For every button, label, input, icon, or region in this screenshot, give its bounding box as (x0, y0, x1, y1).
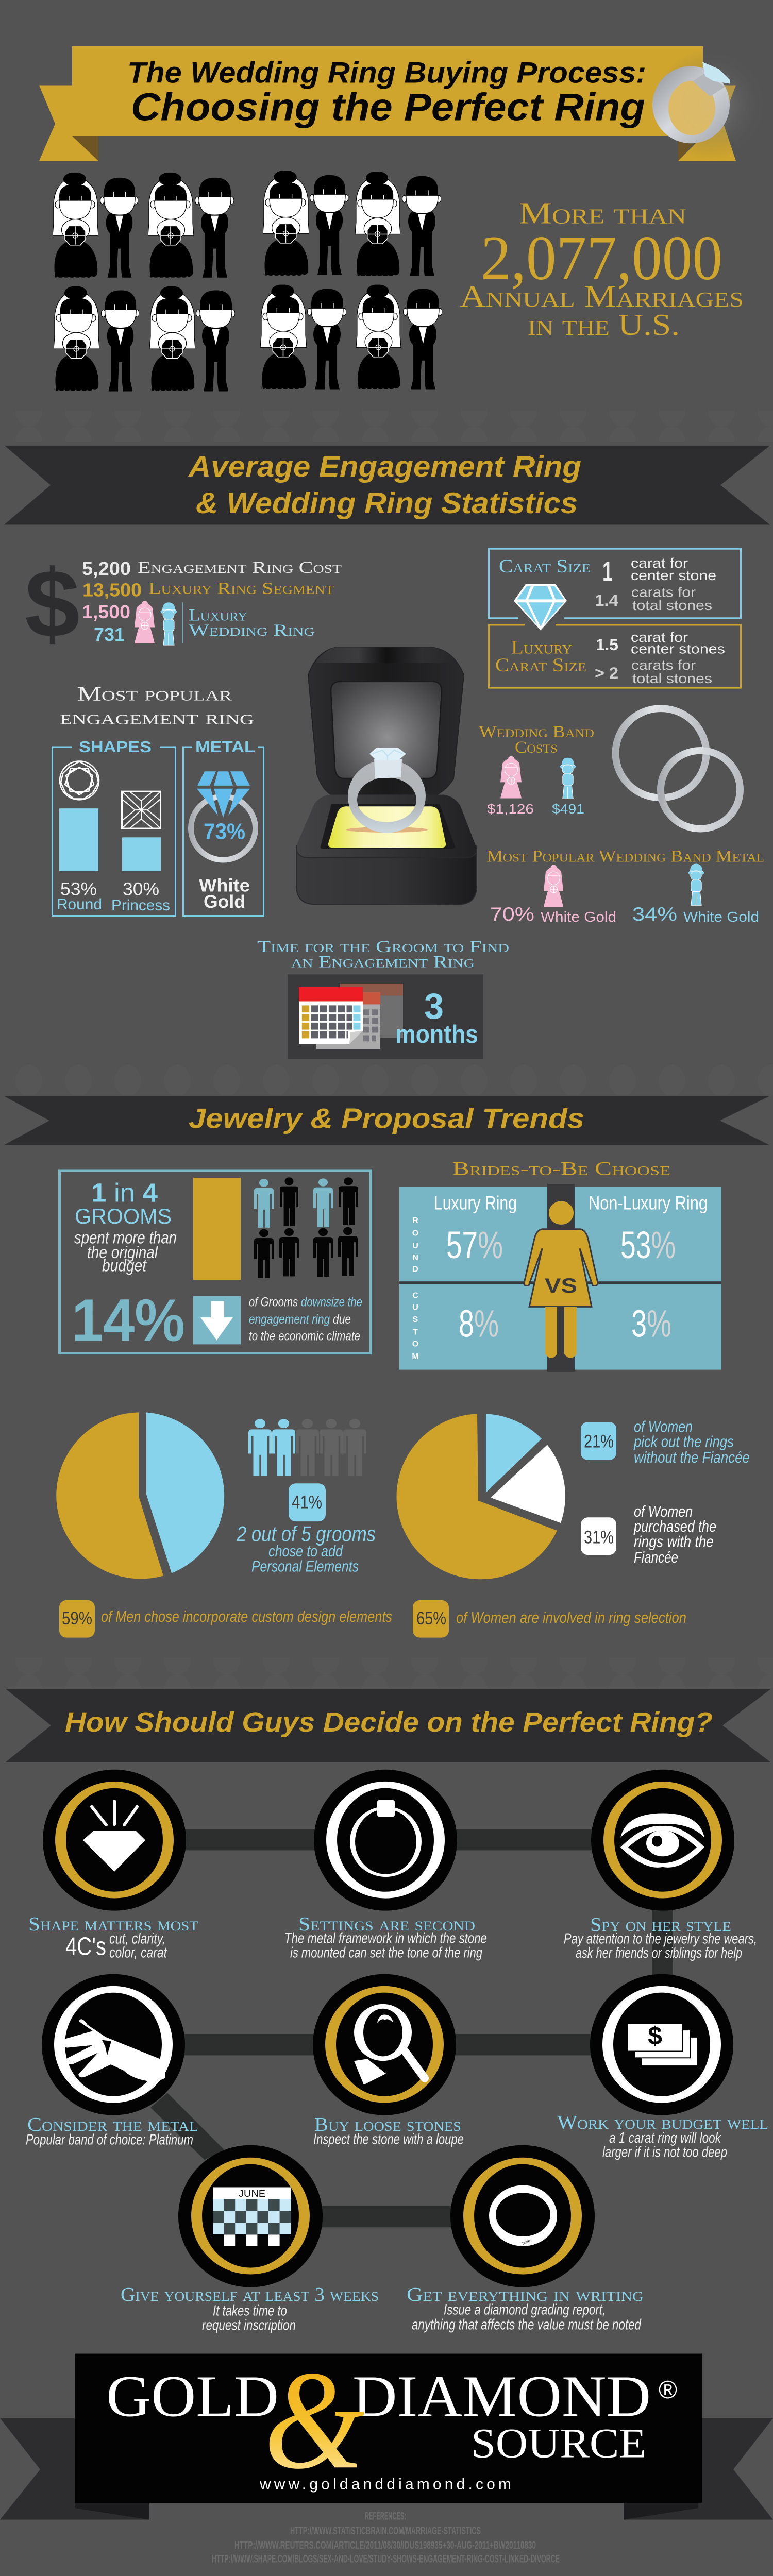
carats for total stones: carats for (631, 657, 696, 673)
description: request inscription (202, 2317, 296, 2333)
heading (257, 938, 509, 971)
label: white gold (199, 875, 250, 912)
callout: 31% of women: rings with the (634, 1533, 714, 1550)
icon: dollar sign: $ (25, 550, 80, 657)
references (212, 2510, 560, 2565)
callout: 21% of women: without the Fiancée (634, 1448, 750, 1466)
icon: round cut (60, 761, 99, 800)
value: bride cost: $1,126 (487, 802, 534, 817)
icon: woman VS: VS (545, 1275, 577, 1297)
references: HTTP://WWW.REUTERS.COM/ARTICLE/2011/08/30/IDUS198935+30-AUG-2011+BW20110830 (234, 2538, 536, 2551)
title line 2: Choosing the Perfect Ring (131, 86, 645, 128)
label: white gold: White (199, 875, 250, 896)
value: 3: 3 (424, 986, 444, 1027)
icon: diamond (514, 584, 567, 630)
callout: 21% of women: of Women (634, 1418, 693, 1436)
icon: June calendar: JUNE (239, 2188, 265, 2199)
heading: Jewelry & Proposal Trends (189, 1103, 584, 1134)
heading: Get everything in writing (407, 2284, 644, 2306)
description: larger if it is not too deep (602, 2144, 727, 2160)
callout: 65% of women: of Women are involved in ring selection (456, 1608, 686, 1626)
value: 53%: 53% (60, 879, 97, 900)
badge: 41%: 41% (292, 1492, 322, 1512)
heading: Buy loose stones (314, 2114, 461, 2136)
heading: Consider the metal (27, 2114, 198, 2136)
carat for center stone: center stone (631, 568, 716, 583)
shapes label: SHAPES (79, 738, 152, 756)
description: The metal framework in which the stone (284, 1930, 487, 1947)
section banner: how to decide (5, 1689, 771, 1762)
heading: Wedding Band (479, 723, 594, 741)
icon: engraved ring (450, 2145, 595, 2287)
callout: 31% of women: of Women (634, 1502, 693, 1520)
description (602, 2130, 727, 2160)
row label: custom: O (412, 1340, 418, 1348)
carats for total stones (631, 585, 712, 613)
label: luxury carat size: Luxury (511, 637, 572, 658)
description: Popular band of choice: Platinum (26, 2132, 193, 2148)
icon: diamond with rays (43, 1770, 186, 1911)
step 1: shape (28, 1770, 199, 1961)
logo: SOURCE: SOURCE (471, 2420, 646, 2466)
icon: ring (314, 1770, 457, 1911)
two out of five grooms: 2 out of 5 grooms (236, 1522, 376, 1546)
icon: blue groom (160, 602, 177, 645)
label: princess: Princess (111, 897, 170, 914)
title ribbon (39, 46, 736, 161)
heading: Most Popular Wedding Band Metal (486, 848, 764, 866)
icon: hand with ring (42, 1974, 185, 2115)
row label: round: N (412, 1253, 418, 1262)
value: 53%: 53% (620, 1224, 676, 1266)
gold bar (193, 1178, 241, 1280)
icon: money stack: $ (648, 2022, 662, 2050)
metal box (183, 747, 264, 916)
step 3: spy (564, 1770, 757, 1961)
callout: 59% of men (59, 1600, 392, 1638)
icon: princess cut (122, 791, 161, 828)
heading: Settings are second (298, 1913, 475, 1935)
icon: diamond ring (652, 49, 768, 160)
panel: brides comparison (399, 1184, 721, 1372)
value: 1: 1 (602, 556, 613, 587)
callout: 59% of men: of Men chose incorporate custom design elements (101, 1607, 392, 1625)
carats for total stones: carats for (631, 585, 696, 600)
description: It takes time to (213, 2303, 287, 2319)
panel: carat size (489, 549, 741, 630)
callout: 21% of women: pick out the rings (633, 1433, 734, 1450)
step 6: budget (557, 1974, 768, 2160)
icon: woman VS (524, 1201, 598, 1358)
icon: pink bride (135, 601, 155, 643)
website: www.goldanddiamond.com (259, 2476, 511, 2493)
row label: custom: M (412, 1352, 419, 1361)
luxury wedding ring label: Wedding Ring (189, 621, 315, 640)
heading: Spy on her style (590, 1914, 731, 1936)
row label: round: O (412, 1229, 418, 1238)
logo: DIAMOND: DIAMOND (352, 2363, 651, 2429)
icon: pink bride (544, 865, 563, 907)
description (284, 1930, 487, 1961)
in the U.S.: in the U.S. (528, 308, 680, 342)
heading (60, 683, 254, 729)
bar: princess (122, 837, 161, 871)
carat for center stone (631, 555, 716, 583)
couples illustration (53, 170, 442, 391)
step connectors (150, 1829, 673, 2227)
metal label: METAL (195, 738, 255, 756)
logo: GOLD: GOLD (106, 2363, 279, 2429)
annual marriages: Annual Marriages (460, 279, 744, 313)
description: Issue a diamond grading report, (444, 2302, 606, 2318)
step 8: in writing (407, 2145, 644, 2333)
icon: June calendar (178, 2145, 323, 2287)
pie chart: women (396, 1414, 565, 1579)
value: 34%: 34% (632, 903, 677, 925)
label: luxury carat size (495, 637, 586, 676)
callout: 65% of women: 65% (416, 1608, 446, 1629)
value: 3%: 3% (631, 1302, 671, 1345)
row label: custom: U (412, 1303, 418, 1312)
carat for center stones (631, 630, 725, 657)
value: 8%: 8% (459, 1302, 499, 1345)
value: 57%: 57% (446, 1224, 503, 1266)
icon: pink bride (500, 756, 522, 798)
callout: 21% of women (581, 1418, 750, 1466)
icon: blue groom (560, 758, 576, 799)
value: 1.4: 1.4 (595, 591, 618, 609)
carat for center stones: carat for (631, 630, 688, 645)
row label: custom: T (413, 1328, 418, 1337)
illustration: ring box (296, 647, 477, 904)
badge: 41% (289, 1483, 326, 1521)
panel: wedding band costs (479, 723, 594, 817)
panel: grooms personal elements (236, 1419, 376, 1575)
heading: Shape matters most (28, 1913, 199, 1935)
panel: time to find a ring (257, 938, 509, 1059)
downsize text: of Grooms downsize the (249, 1296, 362, 1309)
logo: ampersand: & (264, 2342, 365, 2498)
downsize text (249, 1296, 362, 1343)
heading: Costs (515, 738, 558, 757)
description: Inspect the stone with a loupe (313, 2131, 464, 2148)
description (564, 1931, 757, 1961)
value: greater than 2: > 2 (595, 664, 618, 682)
column heading: luxury ring: Luxury Ring (434, 1192, 517, 1213)
chose to add personal elements (251, 1542, 359, 1575)
carats for total stones: total stones (632, 598, 712, 613)
step 2: settings (284, 1770, 487, 1961)
heading: Most popular (77, 683, 232, 705)
heading: Work your budget well (557, 2112, 768, 2133)
description (202, 2303, 296, 2333)
carats for total stones (631, 657, 712, 686)
bride luxury value: 1,500 (82, 601, 130, 622)
icon: engraved ring: bride (522, 2239, 531, 2246)
description (412, 2302, 642, 2333)
column heading: non-luxury ring: Non-Luxury Ring (589, 1192, 708, 1213)
callout: 31% of women: 31% (584, 1527, 614, 1547)
icon: interlocked wedding bands (615, 708, 740, 829)
luxury segment label: Luxury Ring Segment (148, 580, 334, 598)
spent more than the original budget: budget (102, 1256, 147, 1275)
marriages statistic (460, 196, 744, 342)
section banner: statistics (4, 446, 770, 525)
value: groom cost: $491 (552, 802, 584, 817)
icon: blue groom (688, 864, 704, 905)
footer ribbon (0, 2418, 773, 2520)
value: 14%: 14% (72, 1286, 185, 1353)
heading: Time for the Groom to Find (257, 938, 509, 956)
row label: round: U (412, 1242, 418, 1250)
heading line 1: Average Engagement Ring (188, 450, 581, 483)
grooms: GROOMS (75, 1204, 172, 1228)
4C's: 4C's (65, 1932, 106, 1960)
value: 1.5: 1.5 (596, 635, 618, 654)
panel: luxury carat size (489, 625, 741, 688)
logo panel (75, 2342, 702, 2503)
bar: round (59, 808, 98, 871)
icon: calendars (299, 984, 403, 1049)
chose to add personal elements: Personal Elements (251, 1557, 359, 1575)
row label: round: R (412, 1216, 418, 1225)
luxury wedding ring label (189, 606, 315, 640)
callout: 59% of men: 59% (62, 1608, 92, 1629)
four Cs list (109, 1930, 167, 1961)
heading: Give yourself at least 3 weeks (121, 2284, 379, 2306)
spent more than the original budget: spent more than (74, 1228, 177, 1247)
icon: down arrow (193, 1296, 241, 1344)
1 in 4: 1 in 4 (91, 1178, 158, 1207)
shapes box (53, 747, 175, 916)
row label: custom: C (412, 1292, 418, 1300)
spent more than the original budget (74, 1228, 177, 1275)
step 7: three weeks (121, 2145, 379, 2333)
dark card (288, 974, 483, 1059)
description: is mounted can set the tone of the ring (290, 1944, 482, 1961)
label: white gold: Gold (204, 891, 245, 912)
luxury segment value: 13,500 (82, 580, 142, 600)
heading line 2: & Wedding Ring Statistics (196, 487, 578, 520)
four Cs list: color, carat (109, 1944, 167, 1961)
description: anything that affects the value must be noted (412, 2316, 642, 2333)
callout: 65% of women (413, 1600, 686, 1638)
label: round: Round (57, 896, 102, 913)
label: white gold: White Gold (683, 909, 759, 925)
number of marriages: 2,077,000 (481, 223, 722, 293)
row label: custom: S (413, 1315, 418, 1324)
panel: most popular wedding band metal (486, 848, 764, 925)
heading: engagement ring (60, 706, 254, 729)
references: REFERENCES: (365, 2510, 406, 2522)
callout: 31% of women: purchased the (633, 1517, 716, 1535)
icon: eye (591, 1770, 734, 1911)
callout: 31% of women (581, 1502, 716, 1566)
value: 70%: 70% (490, 903, 534, 925)
callout: 21% of women: 21% (584, 1431, 614, 1451)
section banner: trends (4, 1096, 769, 1145)
icon: magnifier and diamond (313, 1974, 456, 2115)
step 5: loose stones (313, 1974, 464, 2148)
engagement ring cost label: Engagement Ring Cost (138, 558, 342, 577)
label: months: months (395, 1020, 478, 1048)
chose to add personal elements: chose to add (268, 1542, 343, 1560)
label: carat size: Carat Size (499, 555, 591, 577)
pie chart: men (56, 1412, 224, 1579)
panel: ring costs (25, 550, 342, 657)
callout: 31% of women: Fiancée (634, 1548, 678, 1566)
groom luxury value: 731 (94, 624, 125, 645)
heading (479, 723, 594, 757)
panel: most popular engagement ring (53, 683, 264, 916)
engagement ring cost value: 5,200 (82, 558, 131, 579)
heading: How Should Guys Decide on the Perfect Ring? (65, 1706, 713, 1738)
heading: an Engagement Ring (291, 953, 475, 971)
description: a 1 carat ring will look (609, 2130, 721, 2146)
downsize text: engagement ring due (249, 1313, 351, 1327)
step 4: metal (26, 1974, 198, 2148)
row label: round: D (412, 1265, 418, 1274)
value: 30%: 30% (123, 879, 159, 900)
more than: More than (519, 196, 686, 230)
logo: registered mark: ® (659, 2376, 677, 2404)
icon: money stack (590, 1974, 733, 2115)
carats for total stones: total stones (632, 671, 712, 686)
value: 73%: 73% (204, 819, 245, 844)
panel: grooms budget (60, 1171, 371, 1353)
heading: brides-to-be choose: Brides-to-Be Choose (452, 1158, 670, 1179)
icon: diamond ring 73% (191, 771, 256, 860)
carat for center stone: carat for (631, 555, 688, 571)
title line 1: The Wedding Ring Buying Process: (127, 57, 646, 89)
pictogram: two of five grooms (248, 1419, 366, 1476)
label: luxury carat size: Carat Size (495, 654, 586, 676)
label: white gold: White Gold (541, 909, 616, 925)
downsize text: to the economic climate (249, 1330, 360, 1343)
carat for center stones: center stones (631, 641, 725, 657)
four Cs list: cut, clarity, (109, 1930, 165, 1947)
references: HTTP://WWW.STATISTICBRAIN.COM/MARRIAGE-STATISTICS (290, 2524, 481, 2537)
pictogram: one in four grooms (254, 1177, 358, 1278)
spent more than the original budget: the original (87, 1243, 158, 1262)
luxury wedding ring label: Luxury (189, 606, 247, 625)
